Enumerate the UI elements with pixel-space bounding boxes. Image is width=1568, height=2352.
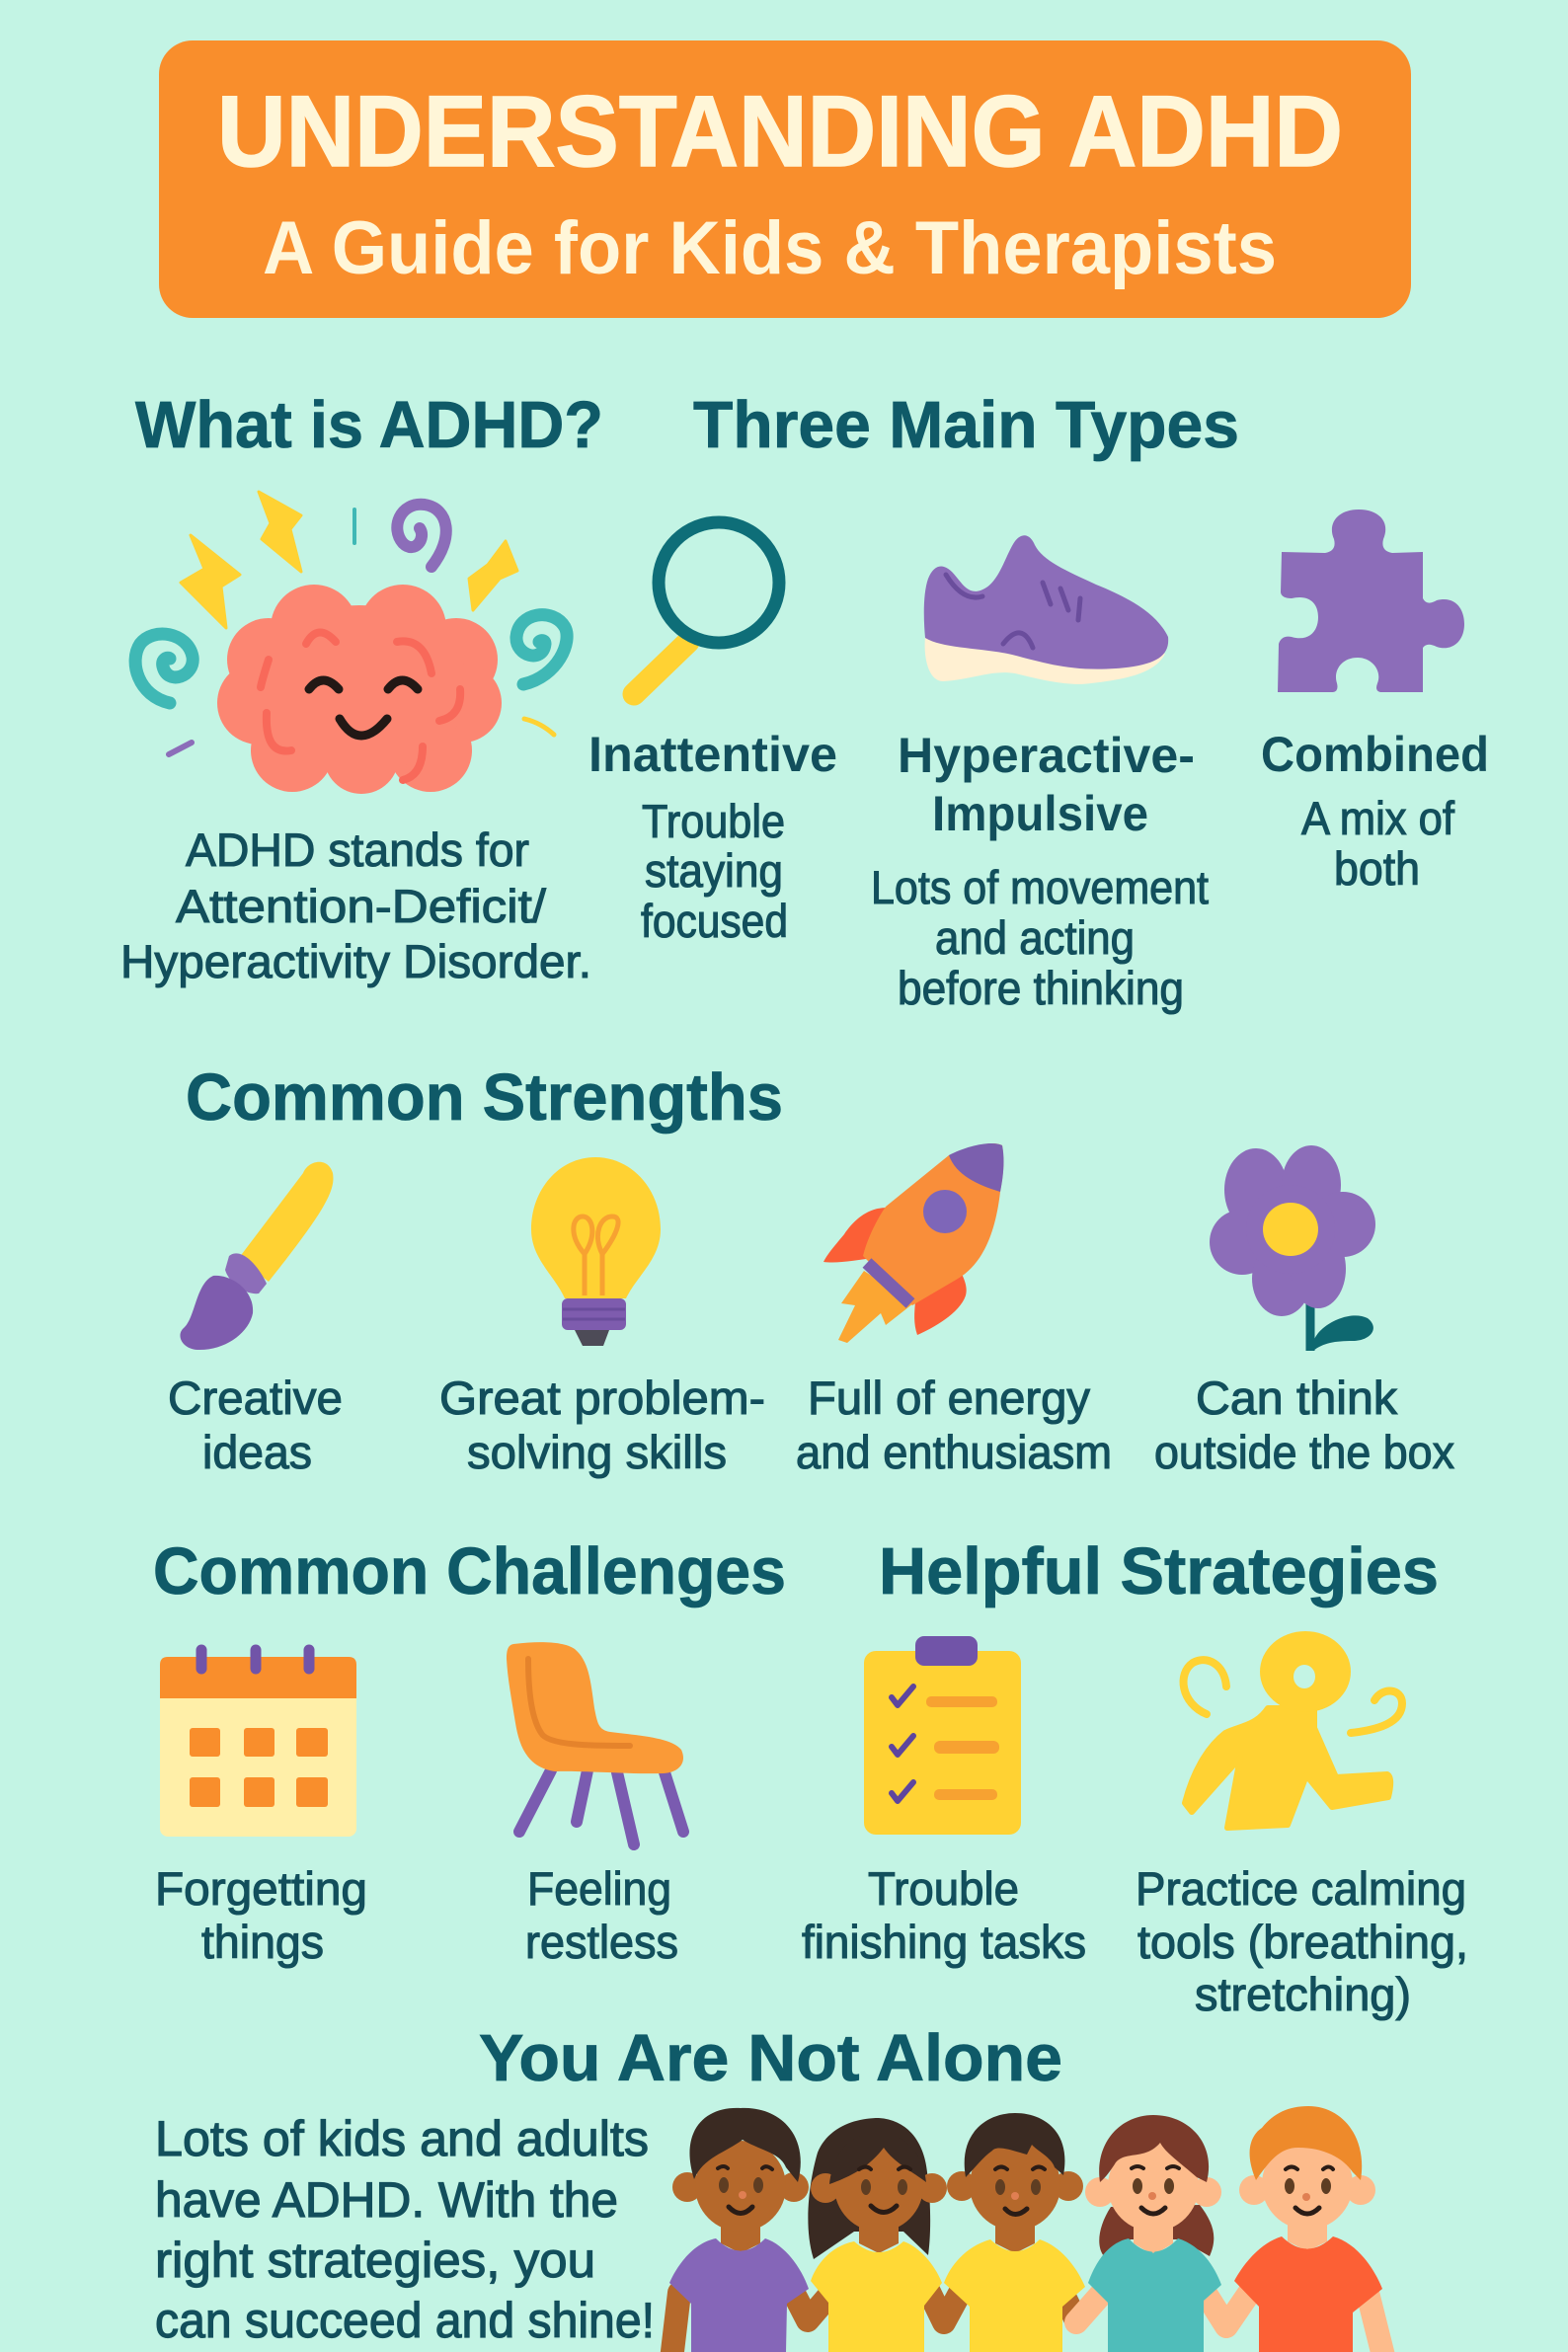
heading: common strengths: Common Strengths <box>186 1060 783 1135</box>
label: problem-solving: solving skills <box>467 1426 727 1478</box>
text: ADHD definition <box>120 823 591 987</box>
label: trouble finishing tasks <box>802 1862 1086 1968</box>
panel: helpful strategies <box>879 1534 1468 2020</box>
icon: magnifying glass <box>634 522 779 694</box>
label: calming tools: Practice calming <box>1136 1862 1466 1915</box>
label: problem-solving <box>439 1372 765 1478</box>
icon: puzzle piece <box>1278 510 1464 692</box>
heading: helpful strategies: Helpful Strategies <box>879 1534 1439 1608</box>
text: encouragement: right strategies, you <box>155 2233 595 2288</box>
text: encouragement: can succeed and shine! <box>155 2293 655 2348</box>
heading: what is ADHD: What is ADHD? <box>135 388 603 462</box>
panel: three main types <box>588 388 1489 1014</box>
panel: you are not alone <box>155 2021 1384 2352</box>
subtitle: A Guide for Kids & Therapists <box>263 206 1277 290</box>
panel: common challenges <box>153 1534 1086 1968</box>
label: trouble finishing tasks: finishing tasks <box>802 1916 1086 1968</box>
heading: common challenges: Common Challenges <box>153 1534 786 1608</box>
icon: sneaker <box>924 535 1168 684</box>
text: hyperactive description: and acting <box>935 911 1135 964</box>
text: ADHD definition: Hyperactivity Disorder. <box>120 935 591 987</box>
text: hyperactive description: Lots of movement <box>871 861 1209 913</box>
kid 4 <box>1085 2115 1221 2352</box>
icon: calendar <box>160 1650 356 1837</box>
label: outside the box: outside the box <box>1154 1426 1454 1478</box>
label: feeling restless <box>525 1862 678 1968</box>
kid 5 <box>1234 2106 1382 2352</box>
label: hyperactive-impulsive: Impulsive <box>932 786 1148 841</box>
label: inattentive: Inattentive <box>588 727 837 782</box>
label: energy: and enthusiasm <box>796 1426 1112 1478</box>
label: hyperactive-impulsive: Hyperactive- <box>898 728 1195 783</box>
text: hyperactive description <box>871 861 1209 1014</box>
icon: rocket <box>823 1143 1003 1343</box>
text: hyperactive description: before thinking <box>898 962 1184 1014</box>
label: forgetting things <box>155 1862 367 1968</box>
icon: happy brain with sparks <box>135 492 567 794</box>
title: UNDERSTANDING ADHD <box>217 75 1343 188</box>
label: energy <box>796 1372 1112 1478</box>
label: problem-solving: Great problem- <box>439 1372 765 1424</box>
label: calming tools: stretching) <box>1195 1968 1411 2020</box>
label: forgetting things: things <box>201 1916 324 1968</box>
kid 1 <box>669 2108 809 2352</box>
kid faces <box>718 2166 1333 2214</box>
label: trouble finishing tasks: Trouble <box>868 1862 1019 1915</box>
text: ADHD definition: ADHD stands for <box>186 823 529 876</box>
label: creative ideas: ideas <box>202 1426 312 1478</box>
text: encouragement <box>155 2111 655 2348</box>
text: inattentive description: Trouble <box>642 795 785 847</box>
text: encouragement: Lots of kids and adults <box>155 2111 649 2166</box>
label: outside the box <box>1154 1372 1454 1478</box>
panel: what is ADHD <box>120 388 603 987</box>
label: combined: Combined <box>1261 727 1489 782</box>
icon: light bulb <box>531 1157 661 1346</box>
icon: paintbrush <box>180 1162 333 1350</box>
text: inattentive description <box>641 795 788 947</box>
label: energy: Full of energy <box>808 1372 1090 1424</box>
label: hyperactive-impulsive <box>898 728 1195 841</box>
arms <box>671 2286 1384 2352</box>
text: ADHD definition: Attention-Deficit/ <box>176 880 547 932</box>
label: creative ideas <box>168 1372 343 1478</box>
title banner <box>159 40 1411 318</box>
text: encouragement: have ADHD. With the <box>155 2172 618 2228</box>
label: calming tools <box>1136 1862 1468 2020</box>
heading: you are not alone: You Are Not Alone <box>479 2021 1062 2095</box>
icon: checklist clipboard <box>864 1636 1021 1835</box>
heading: three main types: Three Main Types <box>693 388 1239 462</box>
text: combined description <box>1301 792 1455 895</box>
label: forgetting things: Forgetting <box>155 1862 367 1915</box>
text: inattentive description: focused <box>641 895 788 947</box>
label: feeling restless: restless <box>525 1916 678 1968</box>
illustration: five kids holding hands <box>669 2106 1384 2352</box>
text: combined description: A mix of <box>1301 792 1455 844</box>
label: outside the box: Can think <box>1196 1372 1398 1424</box>
icon: chair <box>507 1642 683 1844</box>
text: inattentive description: staying <box>645 844 783 897</box>
label: creative ideas: Creative <box>168 1372 343 1424</box>
icon: flower <box>1210 1145 1375 1351</box>
kid 3 <box>944 2113 1085 2352</box>
icon: calm stretching figure <box>1184 1631 1402 1828</box>
label: feeling restless: Feeling <box>527 1862 671 1915</box>
kid 2 <box>808 2118 947 2352</box>
panel: common strengths <box>168 1060 1454 1478</box>
text: combined description: both <box>1334 842 1420 895</box>
label: calming tools: tools (breathing, <box>1137 1916 1468 1968</box>
